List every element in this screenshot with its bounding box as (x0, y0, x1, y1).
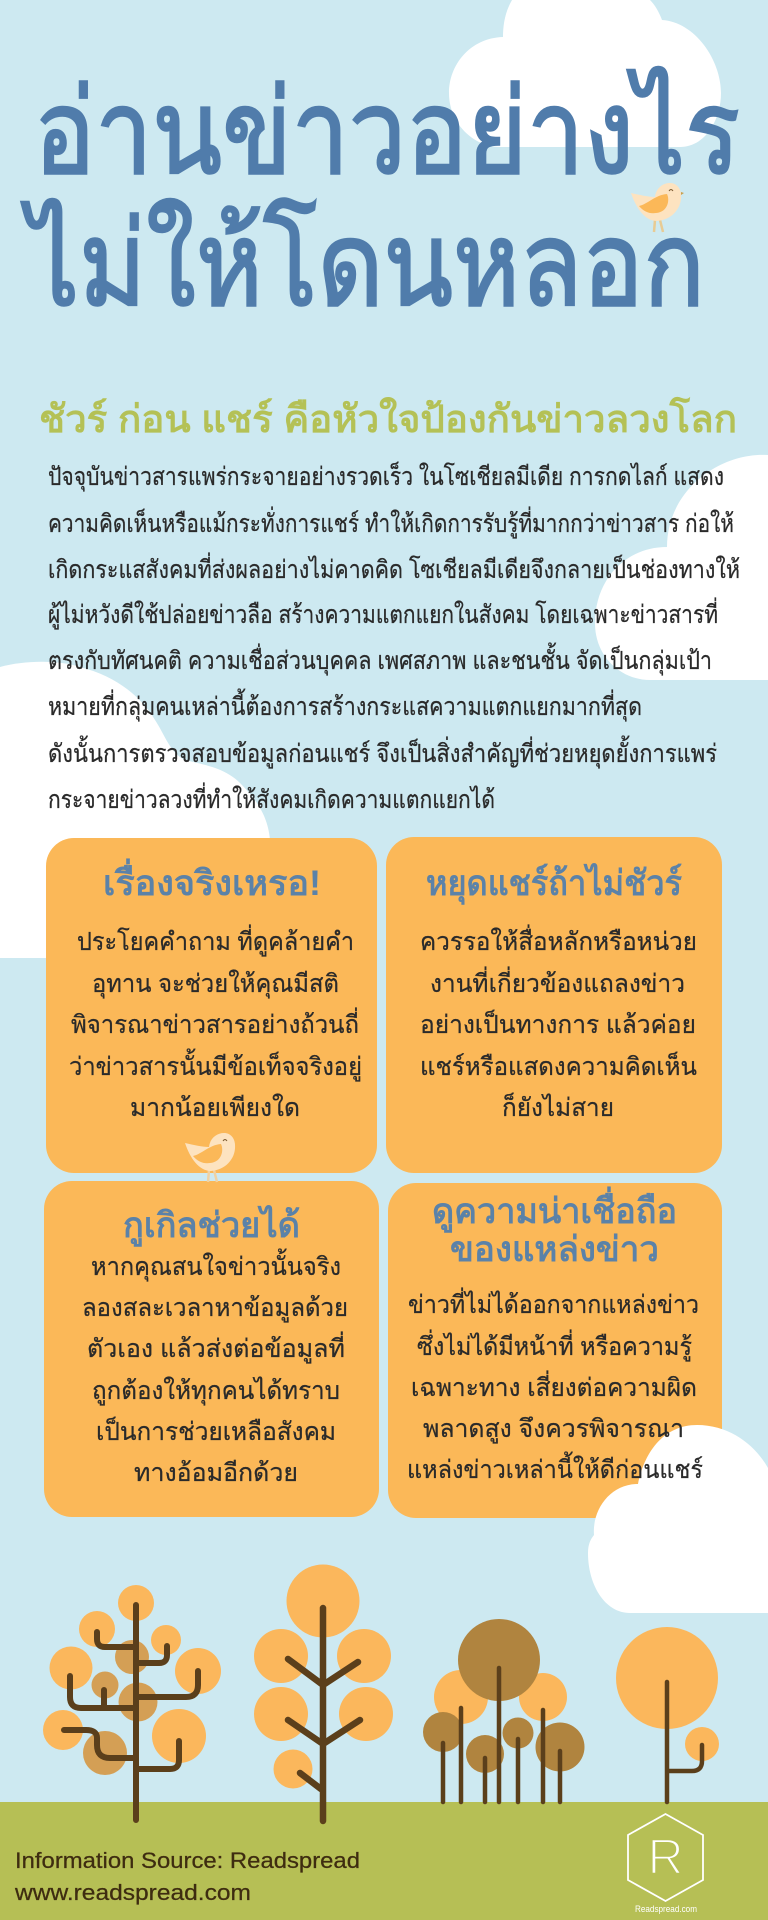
tree 3 (423, 1619, 584, 1802)
card text: ดูความน่าเชื่อถือ: แหล่งข่าวเหล่านี้ให้ดีก่อนแชร์ (407, 1451, 703, 1484)
card text: ดูความน่าเชื่อถือ: ข่าวที่ไม่ได้ออกจากแหล่งข่าว (408, 1287, 699, 1319)
card text: กูเกิลช่วยได้: ตัวเอง แล้วส่งต่อข้อมูลที่ (87, 1331, 345, 1364)
card text: เรื่องจริงเหรอ: อุทาน จะช่วยให้คุณมีสติ (92, 969, 339, 999)
card text: ดูความน่าเชื่อถือ: ของแหล่งข่าว (450, 1230, 659, 1269)
logo: Readspread hexagon: R (647, 1829, 684, 1885)
intro paragraph (48, 461, 740, 814)
ground (0, 1802, 768, 1920)
footer source text: www.readspread.com (14, 1880, 251, 1905)
card text: หยุดแชร์ถ้าไม่ชัวร์: ก็ยังไม่สาย (502, 1092, 614, 1122)
card text: กูเกิลช่วยได้: เป็นการช่วยเหลือสังคม (96, 1416, 336, 1446)
card text: หยุดแชร์ถ้าไม่ชัวร์: งานที่เกี่ยวข้องแถลงข่าว (430, 966, 685, 998)
footer source text: Information Source: Readspread (15, 1848, 360, 1873)
card: หยุดแชร์ถ้าไม่ชัวร์ (386, 837, 722, 1173)
card text: ดูความน่าเชื่อถือ: พลาดสูง จึงควรพิจารณา (423, 1415, 684, 1444)
tree 4 (616, 1627, 719, 1802)
tree 1 (43, 1585, 221, 1820)
card text: เรื่องจริงเหรอ (69, 858, 362, 1122)
card text: ดูความน่าเชื่อถือ: เฉพาะทาง เสี่ยงต่อความผิด (411, 1370, 697, 1402)
card text: หยุดแชร์ถ้าไม่ชัวร์: ควรรอให้สื่อหลักหรือหน่วย (420, 924, 697, 956)
card text: กูเกิลช่วยได้ (82, 1204, 348, 1487)
cloud: bottom right (588, 1425, 768, 1613)
cloud: left middle (0, 662, 270, 958)
logo: Readspread hexagon (628, 1814, 703, 1914)
card: ดูความน่าเชื่อถือ (388, 1183, 722, 1518)
card: เรื่องจริงเหรอ (46, 838, 377, 1173)
footer source text (14, 1848, 360, 1905)
card text: กูเกิลช่วยได้: กูเกิลช่วยได้ (123, 1204, 300, 1247)
subheading: ชัวร์ ก่อน แชร์ คือหัวใจป้องกันข่าวลวงโลก (39, 396, 737, 441)
tree 2 (254, 1564, 393, 1821)
card text: หยุดแชร์ถ้าไม่ชัวร์ (420, 862, 697, 1122)
card text: กูเกิลช่วยได้: หากคุณสนใจข่าวนั้นจริง (91, 1248, 341, 1282)
icon: bird on title (631, 183, 684, 232)
card text: เรื่องจริงเหรอ: เรื่องจริงเหรอ! (103, 858, 321, 903)
cloud: right middle (595, 455, 768, 680)
intro paragraph: หมายที่กลุ่มคนเหล่านี้ต้องการสร้างกระแสความแตกแยกมากที่สุด (48, 688, 642, 722)
card: กูเกิลช่วยได้ (44, 1181, 379, 1517)
cloud: top right (449, 0, 721, 147)
card text: กูเกิลช่วยได้: ทางอ้อมอีกด้วย (134, 1459, 298, 1487)
card text: เรื่องจริงเหรอ: ประโยคคำถาม ที่ดูคล้ายคำ (77, 924, 354, 957)
icon: bird on card (185, 1133, 235, 1182)
card text: กูเกิลช่วยได้: ถูกต้องให้ทุกคนได้ทราบ (92, 1376, 340, 1406)
card text: หยุดแชร์ถ้าไม่ชัวร์: อย่างเป็นทางการ แล้วค่อย (420, 1009, 696, 1039)
intro paragraph: กระจายข่าวลวงที่ทำให้สังคมเกิดความแตกแยกได้ (48, 782, 495, 814)
card text: กูเกิลช่วยได้: ลองสละเวลาหาข้อมูลด้วย (82, 1294, 348, 1323)
title (21, 67, 740, 331)
card text: ดูความน่าเชื่อถือ: ดูความน่าเชื่อถือ (432, 1186, 677, 1233)
card text: หยุดแชร์ถ้าไม่ชัวร์: หยุดแชร์ถ้าไม่ชัวร์ (426, 862, 682, 905)
card text: เรื่องจริงเหรอ: มากน้อยเพียงใด (130, 1093, 300, 1122)
card text: เรื่องจริงเหรอ: ว่าข่าวสารนั้นมีข้อเท็จจริงอยู่ (69, 1048, 362, 1082)
card text: หยุดแชร์ถ้าไม่ชัวร์: แชร์หรือแสดงความคิดเห็น (420, 1051, 697, 1081)
card text: ดูความน่าเชื่อถือ: ซึ่งไม่ได้มีหน้าที่ หรือความรู้ (417, 1329, 692, 1362)
card text: ดูความน่าเชื่อถือ (407, 1186, 703, 1484)
card text: เรื่องจริงเหรอ: พิจารณาข่าวสารอย่างถ้วนถี่ (71, 1007, 359, 1039)
logo: Readspread hexagon: Readspread.com (635, 1904, 697, 1914)
